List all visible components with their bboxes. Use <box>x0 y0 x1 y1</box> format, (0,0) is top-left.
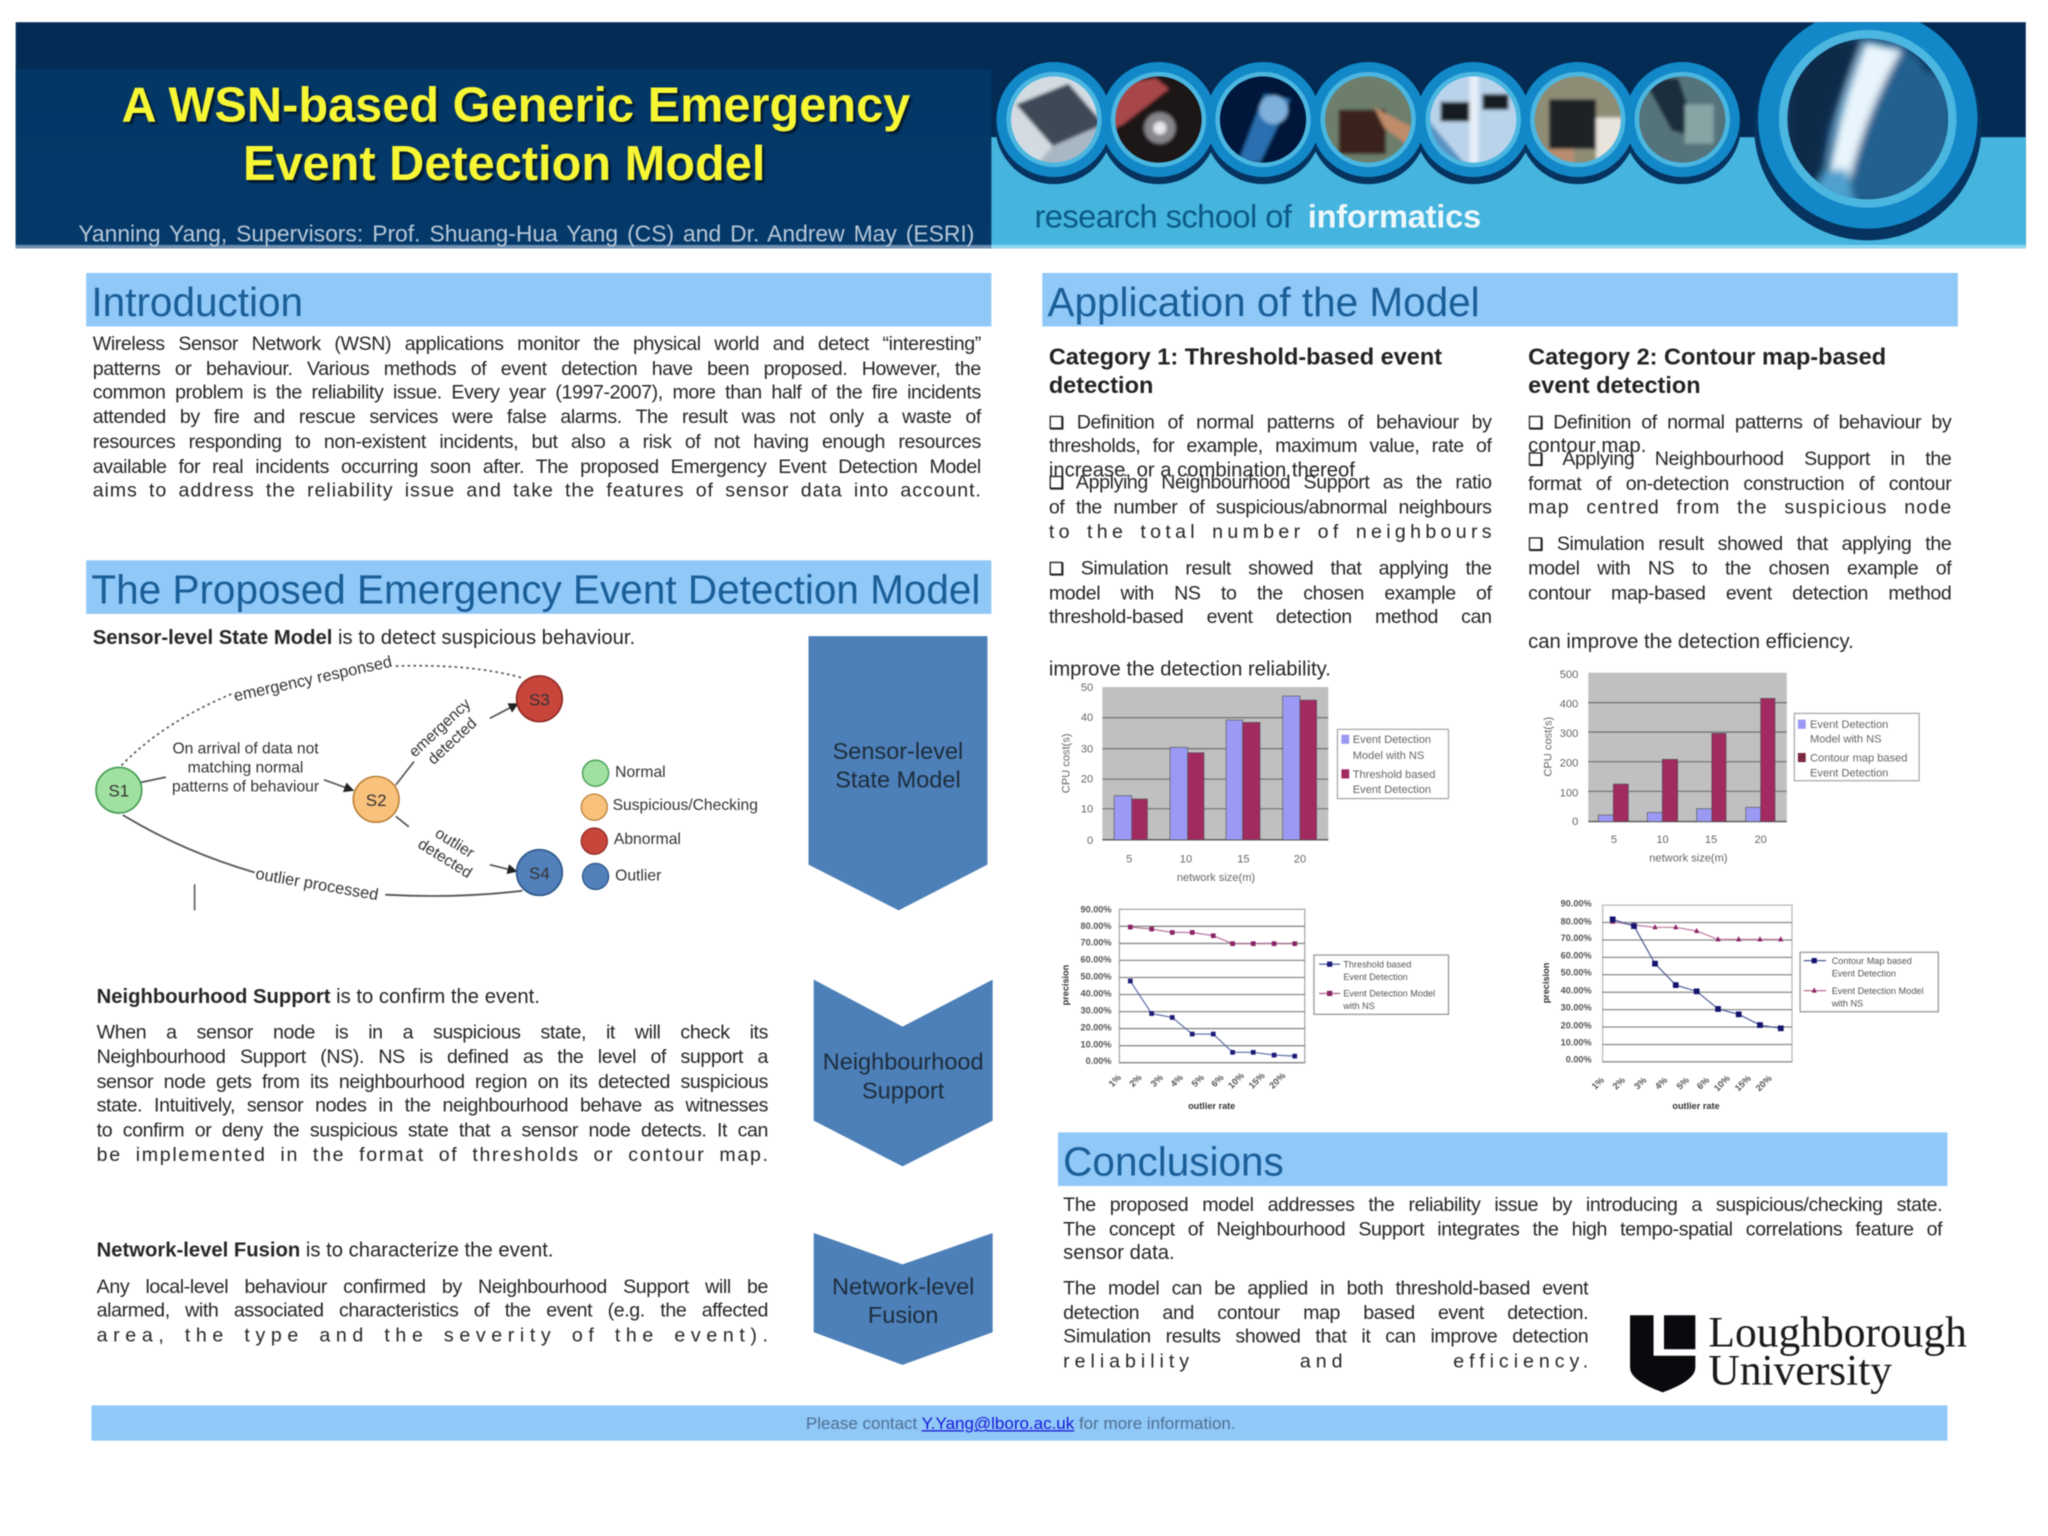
panel: conclusions heading: Conclusions <box>1063 1139 1284 1185</box>
node S1: S1 <box>108 782 129 801</box>
text: category 1 bullets: of the number of suspicious/abnormal neighbours <box>1049 496 1492 519</box>
text: network-level fusion <box>96 1240 774 1347</box>
panel: application heading <box>1042 273 1958 327</box>
label: on arrival: matching normal <box>188 760 303 777</box>
node S2: S2 <box>366 791 387 810</box>
text: category 2 bullets: ❑ Definition of normal patterns of behaviour by <box>1528 411 1951 434</box>
chart: threshold precision line chart: Event Detection <box>1343 972 1408 982</box>
node S3: S3 <box>529 690 550 709</box>
text: neighbourhood support: be implemented in the format of thresholds or contour map. <box>97 1144 770 1166</box>
panel: conclusions heading <box>1058 1132 1947 1186</box>
chart: threshold precision line chart: 60.00% <box>1081 954 1112 964</box>
heading: category 2 <box>1528 344 1886 398</box>
label: outlier detected: detected <box>415 836 475 882</box>
label: outlier processed: outlier processed <box>254 865 380 904</box>
chart: contour precision line chart: Event Detection <box>1832 969 1896 979</box>
text: conclusions paragraph one: The concept of Neighbourhood Support integrates the high tempo-spatial correlations feature of <box>1063 1218 1942 1240</box>
text: category 1 bullets: model with NS to the chosen example of <box>1049 583 1492 605</box>
heading: category 1: detection <box>1049 372 1153 398</box>
icon: large photo bubble <box>1754 9 1981 240</box>
text: category 2 bullets: map centred from the suspicious node <box>1528 496 1953 519</box>
label: emergency detected: emergency <box>406 695 474 761</box>
chart: contour precision line chart: 6% <box>1695 1075 1711 1091</box>
header banner <box>14 21 2027 250</box>
chart: contour precision line chart: 15% <box>1733 1073 1753 1093</box>
heading: category 2: event detection <box>1528 372 1701 398</box>
text: sensor-level intro: Sensor-level State Model is to detect suspicious behaviour. <box>93 627 635 649</box>
chart: contour precision line chart: precision <box>1541 962 1551 1003</box>
text: network-level fusion: area, the type and the severity of the event). <box>97 1325 774 1347</box>
logo: Loughborough University <box>1629 1309 1967 1395</box>
chart: threshold bar chart: 10 <box>1081 803 1093 815</box>
chart: threshold precision line chart: 80.00% <box>1081 921 1112 931</box>
text: neighbourhood support: Neighbourhood Support is to confirm the event. <box>97 986 540 1008</box>
text: conclusions paragraph one: The proposed model addresses the reliability issue by introducing a suspicious/checking state. <box>1063 1194 1942 1216</box>
chart: contour bar chart: 0 <box>1572 816 1578 828</box>
text: category 1 bullets: improve the detection reliability. <box>1049 658 1331 680</box>
chart: threshold bar chart: Threshold based <box>1353 769 1435 781</box>
chart: contour bar chart: Contour map based <box>1810 752 1907 764</box>
diagram: state model <box>94 653 758 912</box>
chart: threshold precision line chart: 40.00% <box>1081 989 1112 999</box>
chart: contour precision line chart: 10.00% <box>1561 1038 1592 1048</box>
chart: contour precision line chart: 3% <box>1632 1075 1649 1091</box>
heading: category 1: Category 1: Threshold-based event <box>1049 344 1442 370</box>
legend: states: Outlier <box>615 867 661 884</box>
chart: threshold bar chart: Event Detection <box>1353 784 1431 796</box>
footer contact bar <box>91 1405 1947 1441</box>
label: outlier detected: outlier <box>432 825 477 862</box>
chart: contour bar chart: 500 <box>1560 669 1578 681</box>
chevron: sensor-level state model <box>808 635 988 911</box>
chart: threshold bar chart: 40 <box>1081 712 1093 724</box>
text: category 2 bullets <box>1528 411 1953 653</box>
chevron: network-level fusion: Network-level <box>832 1273 974 1300</box>
text: category 1 bullets: thresholds, for example, maximum value, rate of <box>1049 435 1492 457</box>
chart: contour bar chart <box>1543 669 1920 864</box>
text: category 2 bullets: contour map. <box>1528 435 1646 457</box>
chart: threshold precision line chart: 1% <box>1107 1072 1123 1089</box>
text: category 1 bullets: increase, or a combination thereof <box>1049 460 1355 482</box>
label: on arrival: On arrival of data not <box>172 741 319 758</box>
text: neighbourhood support: to confirm or deny the suspicious state that a sensor node detects. It can <box>97 1119 768 1142</box>
text: introduction body <box>92 333 982 502</box>
chart: contour precision line chart: 90.00% <box>1561 899 1592 909</box>
panel: introduction heading <box>86 273 991 327</box>
chart: threshold bar chart: 0 <box>1087 835 1093 847</box>
arrow: S4 to S1 <box>123 815 522 896</box>
legend: states: Abnormal <box>614 831 681 848</box>
text: conclusions paragraph one: sensor data. <box>1063 1243 1175 1265</box>
chart: contour precision line chart: 30.00% <box>1561 1003 1592 1013</box>
footer contact bar: Please contact Y.Yang@lboro.ac.uk for more information. <box>806 1413 1236 1433</box>
title: A WSN-based Generic Emergency <box>122 77 910 132</box>
chart: threshold bar chart: 20 <box>1294 854 1306 866</box>
chart: contour precision line chart: 60.00% <box>1561 951 1592 961</box>
text: introduction body: Wireless Sensor Network (WSN) applications monitor the physical world and detect “interesting” <box>93 333 981 355</box>
logo: Loughborough University: University <box>1708 1346 1892 1394</box>
legend: states: Suspicious/Checking <box>613 797 758 814</box>
authors line: Yanning Yang, Supervisors: Prof. Shuang-Hua Yang (CS) and Dr. Andrew May (ESRI) <box>78 221 974 247</box>
arrow: S2 to S4 <box>396 816 516 871</box>
arrow: emergency responsed <box>121 666 522 765</box>
chart: contour precision line chart: 5% <box>1675 1075 1691 1091</box>
logo: Loughborough University: Loughborough <box>1708 1309 1967 1357</box>
node S4 <box>517 850 562 895</box>
chart: contour precision line chart: 1% <box>1590 1075 1606 1091</box>
chart: contour precision line chart: 20% <box>1754 1073 1774 1093</box>
chart: contour precision line chart: with NS <box>1831 999 1863 1009</box>
text: conclusions paragraph two: detection and contour map based event detection. <box>1063 1302 1588 1324</box>
text: neighbourhood support: sensor node gets from its neighbourhood region on its detected suspicious <box>97 1071 768 1093</box>
node S3 <box>517 676 562 722</box>
text: category 2 bullets: format of on-detection construction of contour <box>1528 473 1951 495</box>
chart: contour precision line chart: 2% <box>1611 1075 1627 1091</box>
chevron: neighbourhood support: Support <box>862 1078 944 1104</box>
text: category 2 bullets: ❑ Simulation result showed that applying the <box>1528 533 1951 555</box>
text: introduction body: attended by fire and rescue services were false alarms. The result was not only a waste of <box>93 406 981 429</box>
chart: threshold precision line chart: 30.00% <box>1081 1005 1112 1015</box>
text: introduction body: patterns or behaviour. Various methods of event detection have been proposed. However, the <box>93 357 981 380</box>
text: neighbourhood support <box>96 986 770 1166</box>
text: category 2 bullets: contour map-based event detection method <box>1528 583 1951 605</box>
text: introduction body: common problem is the reliability issue. Every year (1997-2007), more than half of the fire incidents <box>93 382 981 404</box>
text: network-level fusion: Network-level Fusion is to characterize the event. <box>97 1240 553 1262</box>
chart: threshold precision line chart: 5% <box>1190 1072 1206 1089</box>
chevron: neighbourhood support <box>813 979 994 1167</box>
icon: photo bubble row <box>995 62 1741 184</box>
chevron: sensor-level state model: State Model <box>835 767 961 793</box>
title <box>122 77 913 191</box>
label: emergency responsed: emergency responsed <box>232 653 394 705</box>
heading: category 2: Category 2: Contour map-based <box>1528 344 1886 370</box>
chart: contour precision line chart: outlier rate <box>1672 1101 1720 1111</box>
text: category 1 bullets: ❑ Applying Neighbourhood Support as the ratio <box>1049 472 1492 494</box>
text: category 2 bullets: can improve the detection efficiency. <box>1528 631 1854 653</box>
chart: threshold bar chart: CPU cost(s) <box>1061 733 1073 793</box>
chart: contour bar chart: network size(m) <box>1649 852 1728 864</box>
chart: threshold precision line chart: 20% <box>1267 1071 1287 1091</box>
chart: threshold bar chart: 20 <box>1081 773 1093 785</box>
chart: threshold precision line chart: Threshold based <box>1343 959 1411 969</box>
chart: contour bar chart: 20 <box>1754 834 1767 846</box>
school name: research school of informatics <box>1034 199 1481 235</box>
chart: threshold bar chart <box>1061 682 1450 884</box>
text: category 2 bullets: ❑ Applying Neighbourhood Support in the <box>1528 448 1951 470</box>
legend: states: Normal <box>615 764 666 781</box>
label: emergency detected: detected <box>425 715 480 768</box>
chart: contour precision line chart: 10% <box>1712 1073 1732 1093</box>
chart: contour bar chart: 300 <box>1560 728 1578 740</box>
arrow: S2 to S3 <box>396 704 517 785</box>
text: neighbourhood support: state. Intuitively, sensor nodes in the neighbourhood behave as witnesses <box>97 1095 768 1117</box>
chart: contour bar chart: 15 <box>1705 834 1717 846</box>
chart: threshold precision line chart: 70.00% <box>1081 938 1112 948</box>
chart: threshold bar chart: Event Detection <box>1353 734 1431 746</box>
chart: threshold precision line chart: precision <box>1060 964 1070 1005</box>
chart: contour bar chart: 10 <box>1656 834 1669 846</box>
chevron: network-level fusion: Fusion <box>868 1302 938 1328</box>
chart: contour bar chart: 100 <box>1560 787 1578 799</box>
label: on arrival: patterns of behaviour <box>172 779 319 796</box>
chart: contour precision line chart: 40.00% <box>1561 985 1592 995</box>
chart: threshold bar chart: Model with NS <box>1353 750 1424 762</box>
chart: contour precision line chart <box>1541 899 1940 1111</box>
chart: contour bar chart: 200 <box>1560 758 1578 770</box>
text: category 2 bullets: model with NS to the chosen example of <box>1528 558 1951 580</box>
chart: threshold precision line chart: 0.00% <box>1086 1056 1112 1066</box>
text: category 1 bullets <box>1048 411 1496 680</box>
chart: contour bar chart: CPU cost(s) <box>1543 717 1555 777</box>
text: network-level fusion: Any local-level behaviour confirmed by Neighbourhood Support will be <box>97 1276 768 1298</box>
chart: threshold precision line chart: 50.00% <box>1081 971 1112 981</box>
chart: contour precision line chart: 50.00% <box>1561 968 1592 978</box>
chart: contour precision line chart: 20.00% <box>1561 1020 1592 1030</box>
chevron: sensor-level state model: Sensor-level <box>833 738 963 764</box>
chart: contour bar chart: Model with NS <box>1810 733 1882 745</box>
chart: contour bar chart: 5 <box>1611 834 1617 846</box>
chart: threshold bar chart: 10 <box>1180 854 1192 866</box>
text: introduction body: aims to address the reliability issue and take the features of sensor data into account. <box>93 480 982 502</box>
chart: contour precision line chart: Contour Map based <box>1832 956 1912 966</box>
text: conclusions paragraph two: reliability and efficiency. <box>1063 1351 1593 1373</box>
chart: threshold precision line chart: 10% <box>1226 1071 1246 1091</box>
chart: contour bar chart: Event Detection <box>1810 767 1888 779</box>
node S4: S4 <box>529 864 550 883</box>
arrow: S1 to S2 <box>141 777 353 790</box>
chart: contour precision line chart: 4% <box>1653 1075 1669 1091</box>
chart: contour precision line chart: 80.00% <box>1561 916 1592 926</box>
chart: threshold bar chart: 15 <box>1237 854 1250 866</box>
chart: threshold precision line chart: 4% <box>1169 1072 1185 1089</box>
text: category 1 bullets: ❑ Simulation result showed that applying the <box>1049 558 1492 580</box>
chart: contour precision line chart: Event Detection Model <box>1832 986 1924 996</box>
text: neighbourhood support: Neighbourhood Support (NS). NS is defined as the level of support a <box>97 1046 768 1068</box>
panel: introduction heading: Introduction <box>91 280 303 325</box>
text: category 1 bullets: ❑ Definition of normal patterns of behaviour by <box>1049 411 1492 434</box>
chart: contour precision line chart: 70.00% <box>1561 933 1592 943</box>
chevron: neighbourhood support: Neighbourhood <box>823 1049 984 1075</box>
text: category 1 bullets: threshold-based event detection method can <box>1049 606 1492 628</box>
chevron: network-level fusion <box>813 1232 994 1366</box>
text: network-level fusion: alarmed, with associated characteristics of the event (e.g. the affected <box>97 1300 768 1322</box>
chart: contour bar chart: Event Detection <box>1810 719 1888 731</box>
chart: threshold precision line chart: Event Detection Model <box>1343 989 1435 999</box>
heading: category 1 <box>1049 344 1443 398</box>
chart: threshold bar chart: 30 <box>1081 743 1093 755</box>
chart: threshold precision line chart: 6% <box>1209 1072 1226 1089</box>
chart: threshold bar chart: 50 <box>1081 682 1093 694</box>
chart: threshold bar chart: network size(m) <box>1177 872 1255 884</box>
text: introduction body: resources responding to non-existent incidents, but also a risk of not having enough resources <box>93 431 981 453</box>
chart: threshold precision line chart: 3% <box>1149 1072 1165 1089</box>
text: neighbourhood support: When a sensor node is in a suspicious state, it will check its <box>97 1022 768 1044</box>
text: introduction body: available for real incidents occurring soon after. The proposed Emergency Event Detection Model <box>93 455 981 477</box>
chart: threshold bar chart: 5 <box>1126 854 1132 866</box>
node S2 <box>353 776 399 822</box>
panel: application heading: Application of the Model <box>1048 280 1480 325</box>
text: conclusions paragraph two <box>1062 1277 1593 1373</box>
text: category 1 bullets: to the total number of neighbours <box>1049 521 1496 543</box>
text: conclusions paragraph two: Simulation results showed that it can improve detection <box>1063 1326 1588 1348</box>
chart: threshold precision line chart: 15% <box>1247 1071 1267 1091</box>
text: conclusions paragraph one <box>1062 1194 1944 1265</box>
chart: threshold precision line chart: 2% <box>1127 1072 1144 1089</box>
chart: contour bar chart: 400 <box>1560 698 1578 710</box>
chart: threshold precision line chart: with NS <box>1342 1001 1375 1011</box>
panel: proposed model heading: The Proposed Emergency Event Detection Model <box>91 567 980 613</box>
legend: states <box>581 760 758 889</box>
text: conclusions paragraph two: The model can be applied in both threshold-based event <box>1063 1277 1588 1300</box>
chart: threshold precision line chart: 90.00% <box>1081 905 1112 915</box>
node S1 <box>96 767 142 813</box>
chart: threshold precision line chart: outlier rate <box>1188 1101 1235 1111</box>
chart: threshold precision line chart: 20.00% <box>1081 1023 1112 1033</box>
chart: contour precision line chart: 0.00% <box>1566 1055 1592 1065</box>
title: Event Detection Model <box>243 136 765 191</box>
chart: threshold precision line chart: 10.00% <box>1081 1039 1112 1049</box>
chart: threshold precision line chart <box>1060 905 1450 1111</box>
